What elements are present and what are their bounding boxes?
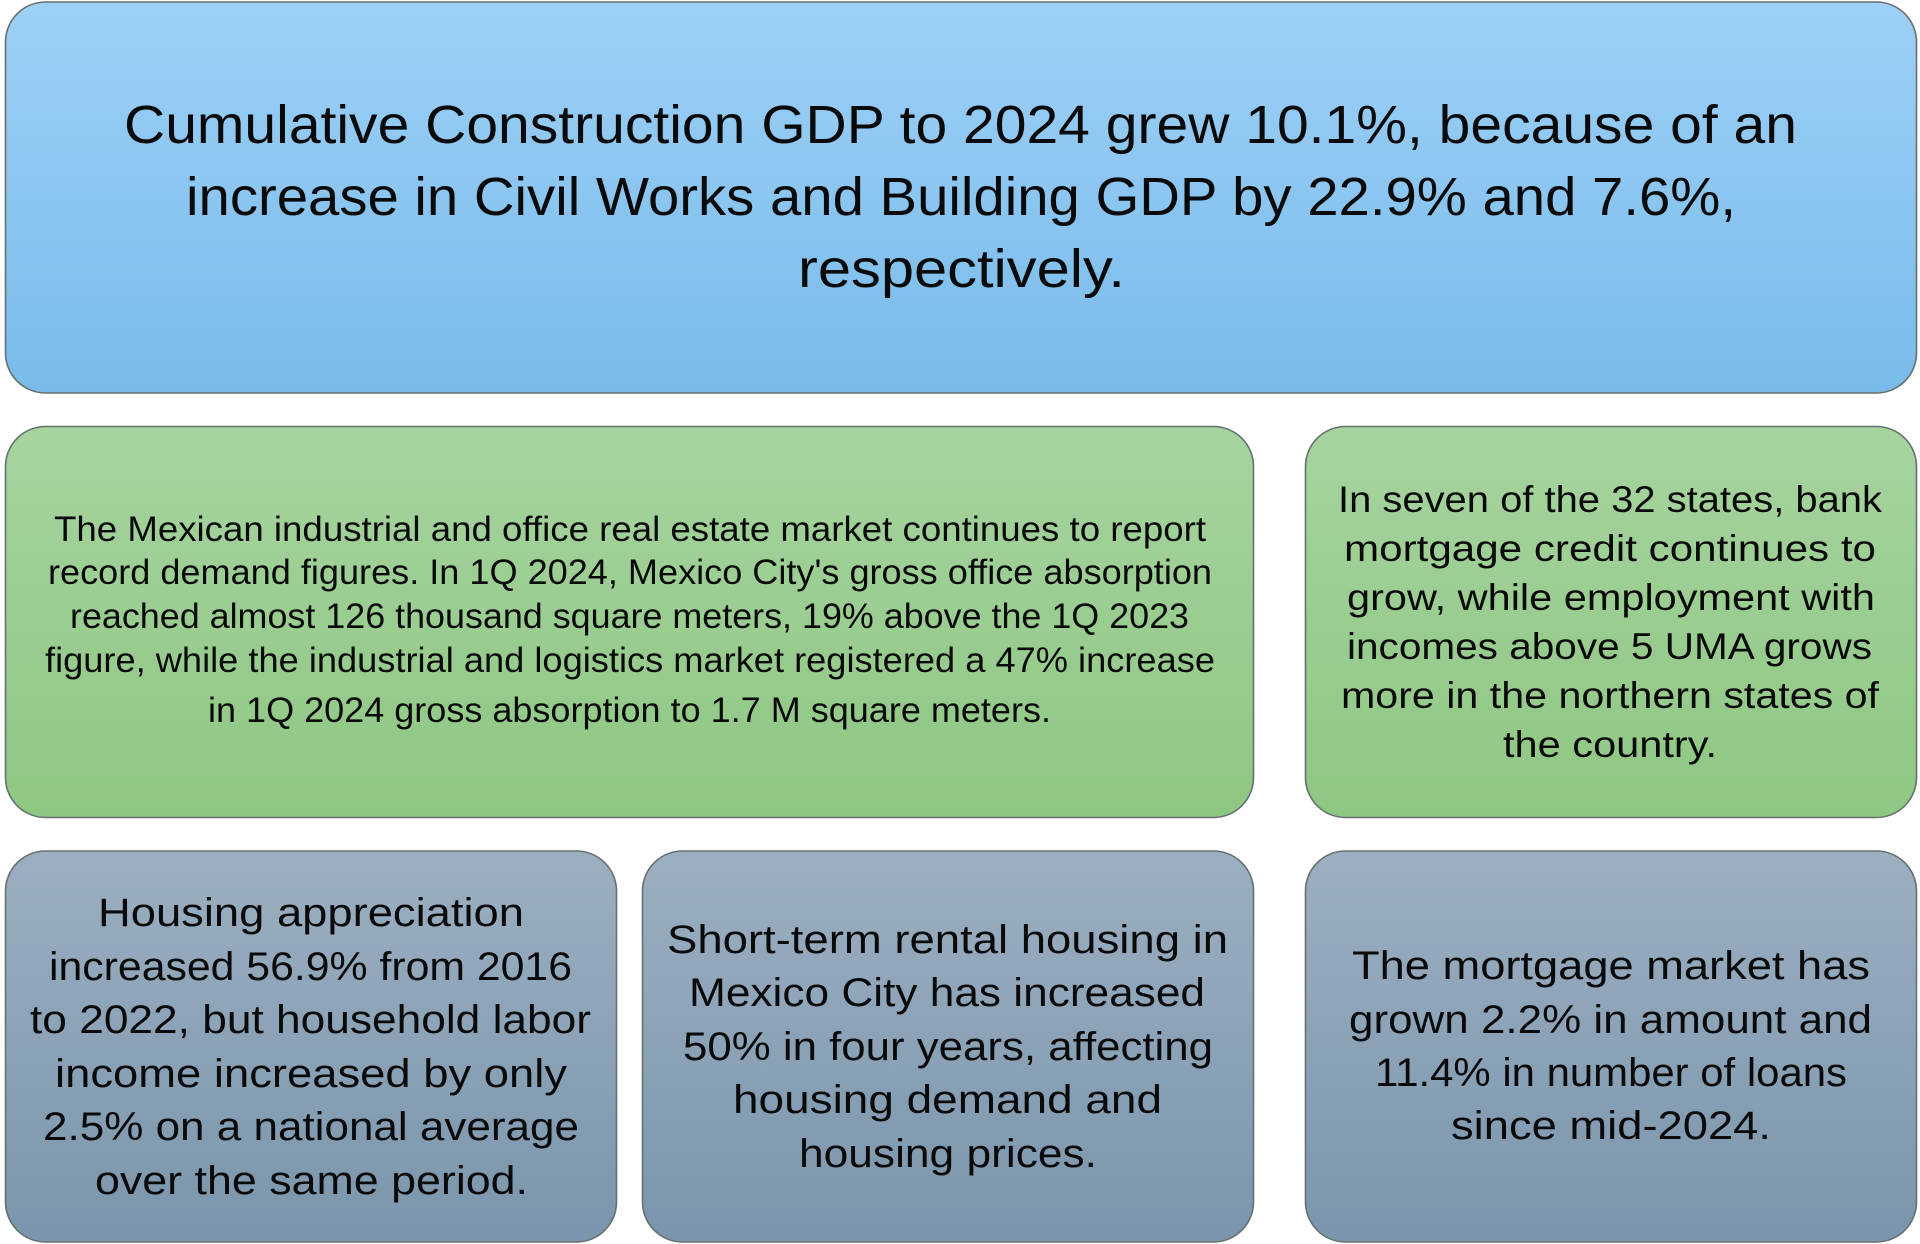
text block: bank mortgage credit: more in the northern states of — [1341, 675, 1880, 716]
text block: appreciation versus income: Housing appreciation — [98, 891, 524, 935]
heading: cumulative construction GDP — [124, 95, 1797, 299]
text block: rental housing growth: 50% in four years, affecting — [683, 1025, 1213, 1069]
text block: mortgage market: The mortgage market has — [1352, 944, 1870, 988]
text block: mortgage market: grown 2.2% in amount and — [1349, 998, 1872, 1042]
text block: mortgage market: since mid-2024. — [1451, 1104, 1771, 1148]
panel: housing appreciation — [6, 851, 616, 1242]
text block: bank mortgage credit: the country. — [1503, 724, 1717, 765]
text block: appreciation versus income — [30, 891, 591, 1203]
text block: rental housing growth — [667, 918, 1228, 1176]
panel: mortgage market growth — [1306, 851, 1916, 1242]
panel: industrial and office real estate — [6, 426, 1254, 818]
text block: bank mortgage credit — [1338, 479, 1883, 765]
text block: bank mortgage credit: grow, while employment with — [1347, 577, 1875, 618]
text block: rental housing growth: housing prices. — [799, 1132, 1097, 1176]
text block: appreciation versus income: income increased by only — [55, 1052, 567, 1096]
text block: rental housing growth: Short-term rental housing in — [667, 918, 1228, 962]
text block: bank mortgage credit: In seven of the 32 states, bank — [1338, 479, 1883, 520]
text block: record demand figures: record demand figures. In 1Q 2024, Mexico City's gross office absorption — [48, 553, 1212, 592]
panel: mortgage credit by state — [1306, 426, 1916, 818]
text block: record demand figures: in 1Q 2024 gross absorption to 1.7 M square meters. — [208, 691, 1051, 730]
panel: short-term rental housing — [642, 851, 1254, 1242]
text block: appreciation versus income: 2.5% on a national average — [43, 1105, 579, 1149]
heading: cumulative construction GDP: Cumulative Construction GDP to 2024 grew 10.1%, because of an — [124, 95, 1797, 155]
heading: cumulative construction GDP: increase in Civil Works and Building GDP by 22.9% and 7.6%, — [186, 167, 1736, 227]
text block: bank mortgage credit: mortgage credit continues to — [1344, 528, 1876, 569]
text block: appreciation versus income: increased 56.9% from 2016 — [49, 945, 572, 989]
panel: construction GDP headline — [6, 2, 1916, 393]
text block: rental housing growth: Mexico City has increased — [689, 971, 1205, 1015]
text block: bank mortgage credit: incomes above 5 UMA grows — [1347, 626, 1872, 667]
text block: appreciation versus income: over the same period. — [95, 1159, 528, 1203]
text block: appreciation versus income: to 2022, but household labor — [30, 998, 591, 1042]
text block: rental housing growth: housing demand and — [733, 1078, 1162, 1122]
text block: record demand figures: figure, while the industrial and logistics market registered a 47% increase — [45, 641, 1215, 680]
heading: cumulative construction GDP: respectively. — [798, 239, 1125, 299]
text block: mortgage market: 11.4% in number of loans — [1375, 1051, 1847, 1095]
text block: record demand figures: reached almost 126 thousand square meters, 19% above the 1Q 2023 — [70, 597, 1189, 636]
text block: record demand figures: The Mexican industrial and office real estate market continues to report — [54, 510, 1206, 549]
text block: mortgage market — [1349, 944, 1872, 1148]
text block: record demand figures — [45, 510, 1215, 730]
